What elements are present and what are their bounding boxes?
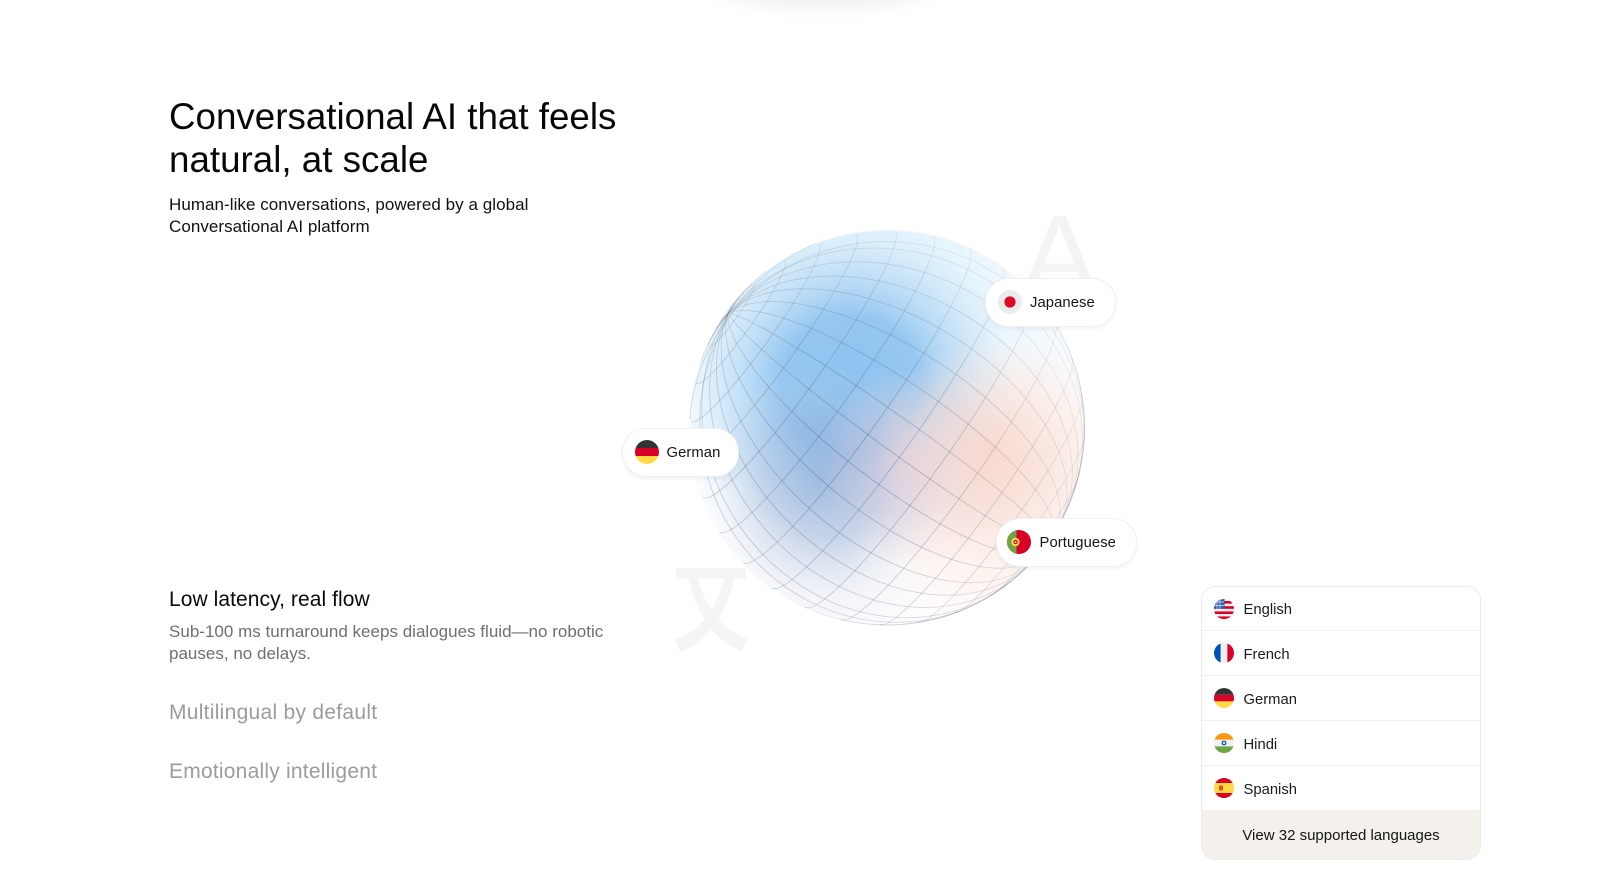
title: Conversational AI that feels bbox=[169, 96, 616, 137]
panel: supported languages list bbox=[1201, 586, 1481, 860]
label: French: French bbox=[1244, 646, 1290, 662]
feature: low latency description: Sub-100 ms turnaround keeps dialogues fluid—no robotic bbox=[169, 622, 603, 641]
label: Portuguese: Portuguese bbox=[1040, 535, 1116, 551]
feature: multilingual heading: Multilingual by default bbox=[169, 701, 377, 724]
icon: Germany flag bbox=[635, 440, 659, 464]
row: Spanish bbox=[1202, 766, 1480, 810]
icon: France flag bbox=[1214, 643, 1234, 663]
row: Hindi bbox=[1202, 720, 1480, 766]
label: Spanish: Spanish bbox=[1244, 782, 1297, 798]
language pill: German bbox=[622, 428, 739, 477]
label: German: German bbox=[666, 445, 720, 461]
row: French bbox=[1202, 630, 1480, 676]
label: Japanese: Japanese bbox=[1030, 295, 1095, 311]
icon: US flag bbox=[1214, 599, 1234, 619]
feature: low latency heading: Low latency, real flow bbox=[169, 588, 370, 611]
feature: emotionally intelligent heading: Emotionally intelligent bbox=[169, 760, 377, 783]
globe colour wash bbox=[690, 230, 1084, 616]
language pill: Japanese bbox=[985, 278, 1116, 327]
label: Hindi: Hindi bbox=[1244, 736, 1277, 752]
button: view all languages bbox=[1202, 810, 1480, 859]
title: natural, at scale bbox=[169, 139, 428, 180]
row: English bbox=[1202, 587, 1480, 630]
icon: Spain flag bbox=[1214, 778, 1234, 798]
subtitle bbox=[169, 195, 528, 236]
icon: Japan flag bbox=[998, 290, 1022, 314]
feature: low latency description: pauses, no delays. bbox=[169, 644, 311, 663]
subtitle: Conversational AI platform bbox=[169, 217, 370, 236]
watermark: chinese character: 文 bbox=[673, 513, 749, 675]
icon: Portugal flag bbox=[1007, 530, 1031, 554]
globe bbox=[689, 230, 1085, 626]
icon: India flag bbox=[1214, 733, 1234, 753]
title bbox=[169, 96, 616, 180]
subtitle: Human-like conversations, powered by a global bbox=[169, 195, 528, 214]
icon: Germany flag bbox=[1214, 688, 1234, 708]
row: German bbox=[1202, 676, 1480, 720]
label: German: German bbox=[1244, 692, 1297, 708]
watermark: latin letter A: A bbox=[1021, 192, 1098, 320]
globe wireframe grid bbox=[611, 152, 1163, 703]
language pill: Portuguese bbox=[996, 518, 1136, 567]
label: English: English bbox=[1244, 602, 1292, 618]
button: view all languages: View 32 supported languages bbox=[1242, 826, 1440, 844]
feature: low latency description bbox=[169, 622, 603, 663]
